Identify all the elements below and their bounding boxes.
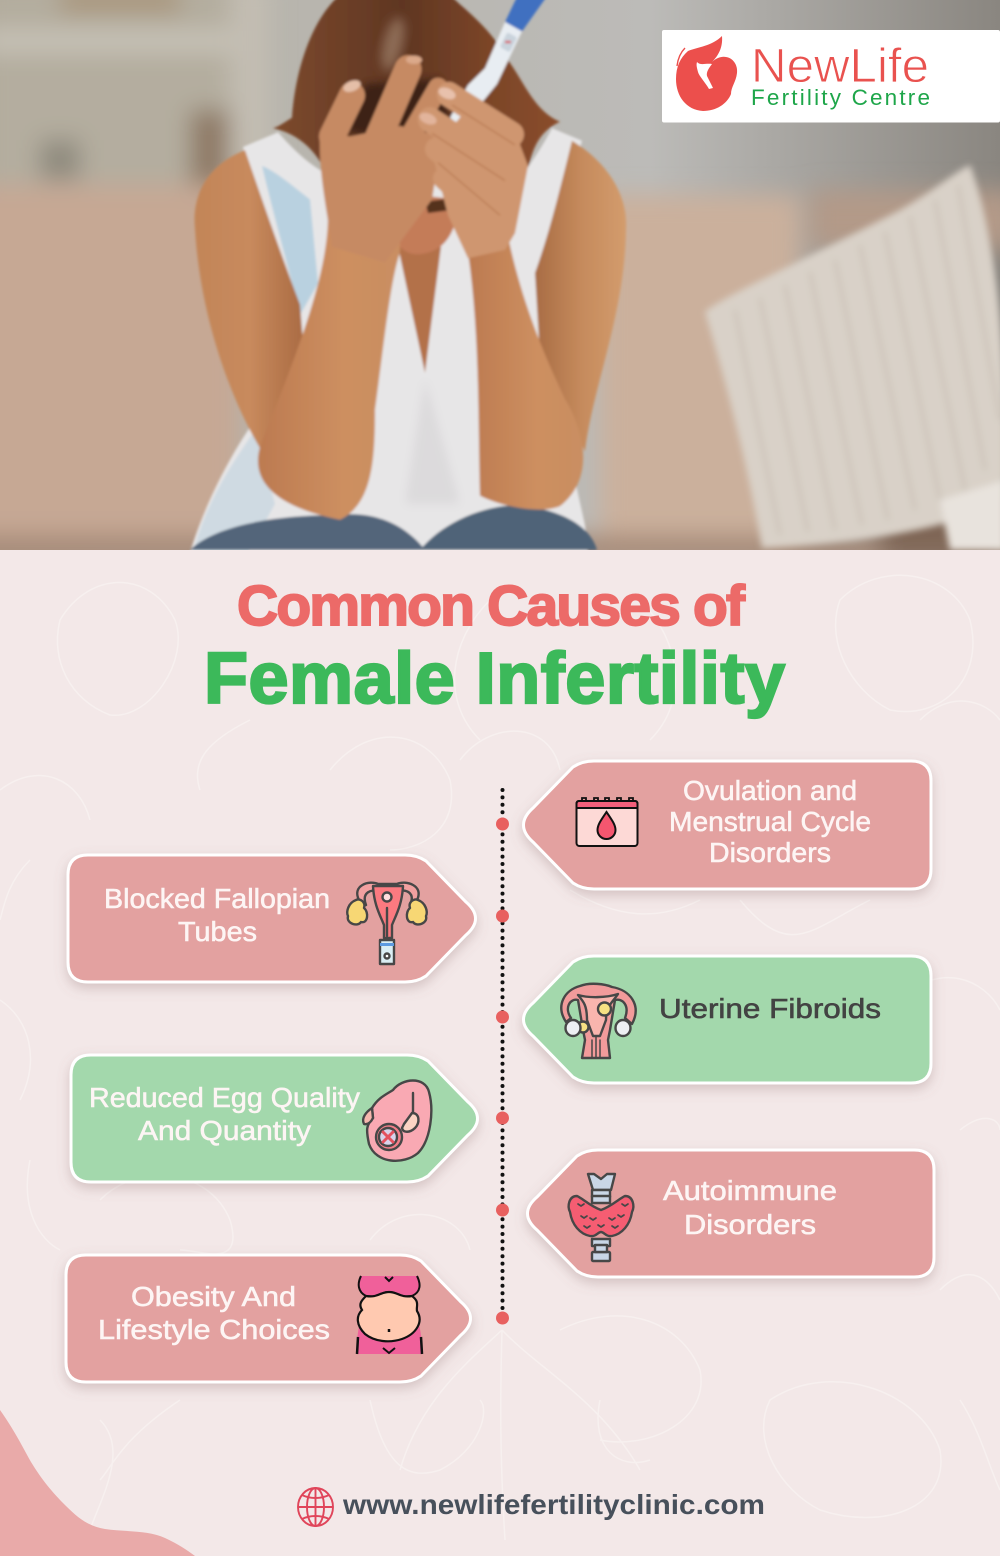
card: Autoimmune Disorders	[528, 1150, 934, 1277]
label: Obesity And	[131, 1281, 296, 1312]
label: And Quantity	[138, 1115, 311, 1146]
icon: uterus with blocked tubes	[347, 883, 427, 964]
timeline	[496, 790, 509, 1324]
label: Disorders	[684, 1209, 816, 1240]
website footer	[298, 1488, 765, 1526]
test stick	[505, 0, 548, 32]
chest	[398, 236, 441, 373]
forearms	[258, 210, 400, 520]
label: Tubes	[178, 916, 257, 947]
card: Obesity And Lifestyle Choices	[66, 1255, 470, 1382]
label	[89, 1082, 360, 1146]
upper arms	[195, 150, 305, 451]
icon: NewLife logo mark	[676, 36, 737, 111]
decorative corner blob	[0, 1410, 195, 1556]
label	[98, 1281, 330, 1345]
label: Ovulation and	[683, 775, 857, 806]
label	[663, 1175, 837, 1240]
icon: abdomen	[357, 1276, 422, 1354]
hair and torso	[185, 0, 590, 572]
card: Blocked Fallopian Tubes	[68, 855, 476, 982]
icon: uterus lining with crossed-out egg	[363, 1080, 431, 1161]
left hand	[320, 69, 442, 263]
icon: globe	[298, 1488, 333, 1526]
icon: calendar with blood drop	[576, 798, 638, 846]
website URL: www.newlifefertilityclinic.com	[342, 1489, 765, 1520]
label: Autoimmune	[663, 1175, 837, 1206]
icon: thyroid	[569, 1174, 633, 1261]
label: Reduced Egg Quality	[89, 1082, 360, 1113]
right hand	[430, 94, 528, 258]
label: Disorders	[709, 837, 831, 868]
label: Uterine Fibroids	[659, 993, 881, 1024]
label: Lifestyle Choices	[98, 1314, 330, 1345]
logo panel	[662, 30, 1000, 122]
shirt	[185, 128, 590, 572]
face	[390, 194, 458, 254]
label: Blocked Fallopian	[104, 883, 330, 914]
heading line 2: Female Infertility	[204, 639, 785, 719]
hero photo: distressed woman holding pregnancy test on a sofa	[0, 0, 1000, 572]
title	[204, 574, 785, 719]
logo wordmark: NewLife	[751, 40, 929, 93]
background floral line pattern	[0, 575, 1000, 1540]
logo tagline: Fertility Centre	[751, 85, 930, 110]
card: Ovulation and Menstrual Cycle Disorders	[524, 761, 931, 889]
label	[669, 775, 871, 868]
icon: uterus with fibroids	[561, 984, 636, 1058]
label: Menstrual Cycle	[669, 806, 871, 837]
heading line 1: Common Causes of	[237, 574, 746, 638]
label	[104, 883, 330, 947]
card: Reduced Egg Quality And Quantity	[71, 1055, 478, 1182]
jeans	[190, 514, 425, 550]
card: Uterine Fibroids	[524, 956, 931, 1083]
